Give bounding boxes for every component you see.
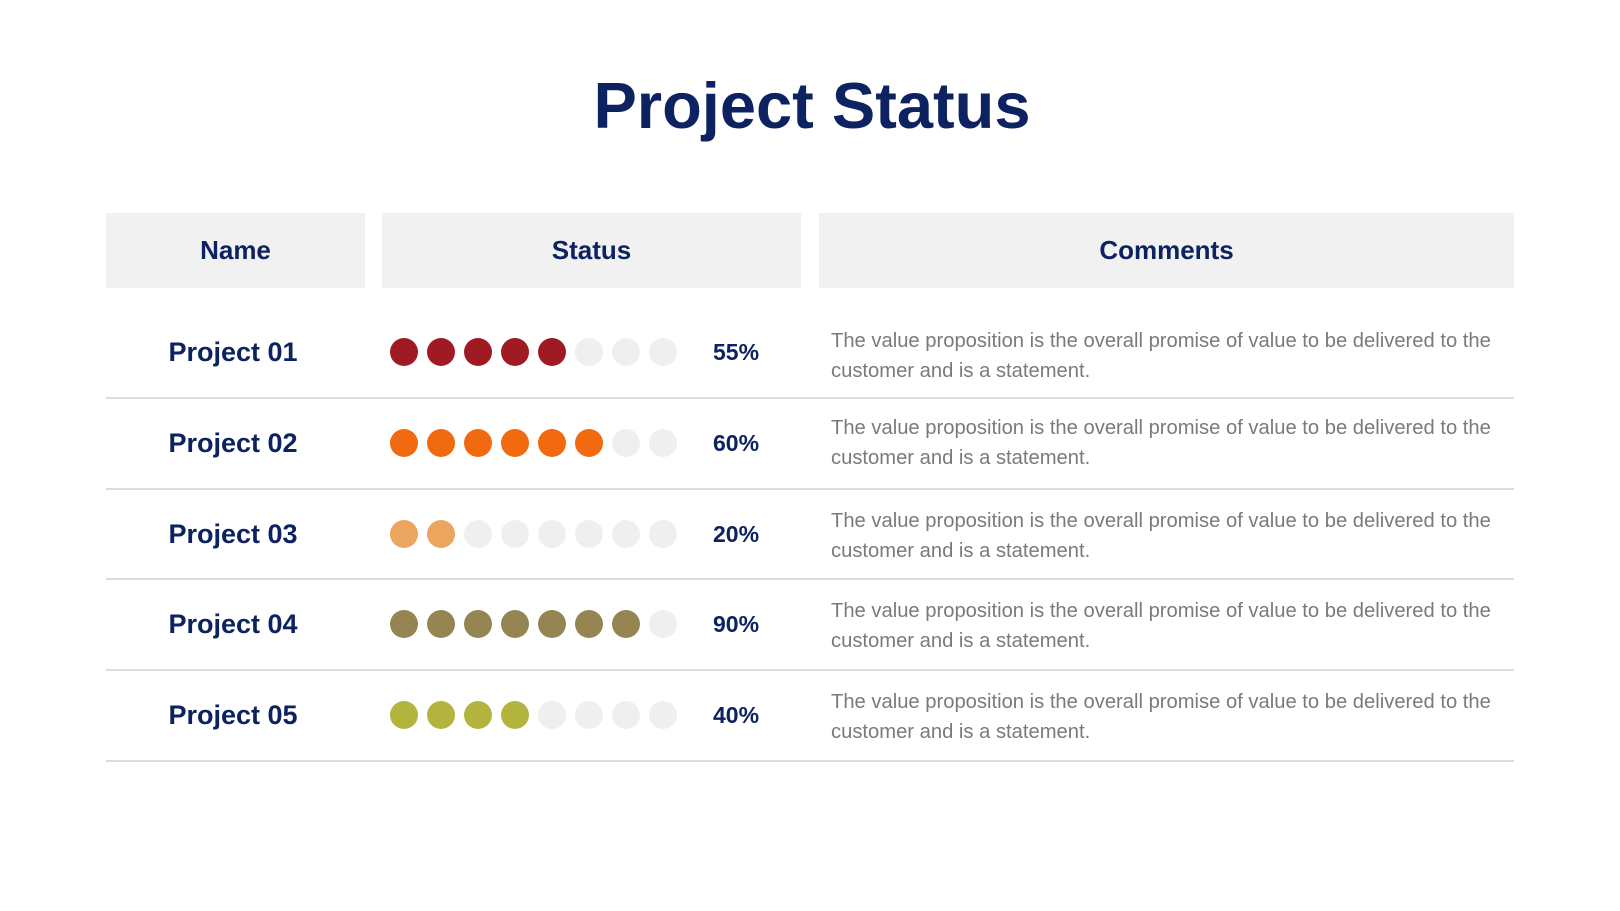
row: Project 01: The value proposition is the overall promise of value to be delivered to the customer and is a statement. (831, 330, 1491, 382)
row: Project 05: The value proposition is the overall promise of value to be delivered to the customer and is a statement. (831, 691, 1491, 743)
row: Project 02: 60% (713, 430, 759, 456)
status dots 01 (390, 338, 677, 366)
header: Comments: Comments (1099, 235, 1234, 265)
row: Project 03: The value proposition is the overall promise of value to be delivered to the customer and is a statement. (831, 510, 1491, 562)
row: Project 05: 40% (713, 702, 759, 728)
row: Project 05 (168, 691, 1491, 743)
header: Name: Name (200, 235, 271, 265)
row: Project 01: 55% (713, 338, 759, 364)
header: Comments (819, 213, 1514, 288)
title: Project Status (593, 69, 1031, 142)
row: Project 02 (168, 417, 1491, 469)
header: Status (382, 213, 801, 288)
row: Project 04: The value proposition is the overall promise of value to be delivered to the customer and is a statement. (831, 600, 1491, 652)
row: Project 01: Project 01 (168, 336, 298, 366)
row: Project 03 (168, 510, 1491, 562)
row: Project 04: Project 04 (168, 608, 298, 638)
row: Project 04 (168, 600, 1491, 652)
row: Project 03: 20% (713, 520, 759, 546)
status dots 02 (390, 429, 677, 457)
row: Project 02: Project 02 (168, 428, 298, 458)
row: Project 04: 90% (713, 610, 759, 636)
status dots 05 (390, 701, 677, 729)
row: Project 01 (168, 330, 1491, 382)
row: Project 03: Project 03 (168, 518, 298, 548)
header: Status: Status (552, 235, 631, 265)
status dots 03 (390, 520, 677, 548)
status dots 04 (390, 610, 677, 638)
row: Project 02: The value proposition is the overall promise of value to be delivered to the customer and is a statement. (831, 417, 1491, 469)
header: Name (106, 213, 365, 288)
row: Project 05: Project 05 (168, 700, 298, 730)
